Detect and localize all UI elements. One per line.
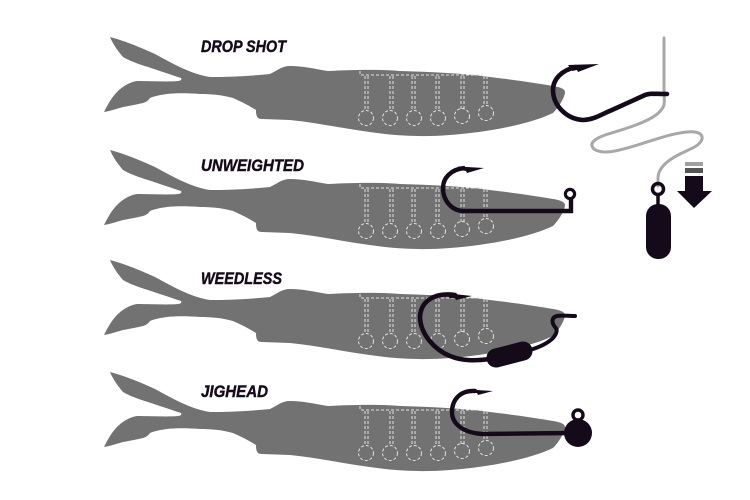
fish: jighead [104, 372, 565, 471]
hook: jighead [452, 390, 592, 447]
heading: weedless: WEEDLESS [201, 269, 283, 288]
arrow: downward force [677, 162, 712, 208]
hook: drop shot [553, 64, 667, 120]
hook: weedless [420, 293, 575, 360]
hook: unweighted [443, 166, 575, 211]
fish: unweighted [104, 150, 565, 249]
fish: drop shot [104, 37, 565, 136]
heading: unweighted: UNWEIGHTED [201, 156, 304, 175]
heading: jighead: JIGHEAD [201, 382, 268, 401]
heading: drop shot: DROP SHOT [201, 37, 287, 56]
sinker: drop shot weight [646, 184, 671, 259]
fish: weedless [104, 260, 565, 359]
fishing line: drop shot [592, 38, 702, 186]
